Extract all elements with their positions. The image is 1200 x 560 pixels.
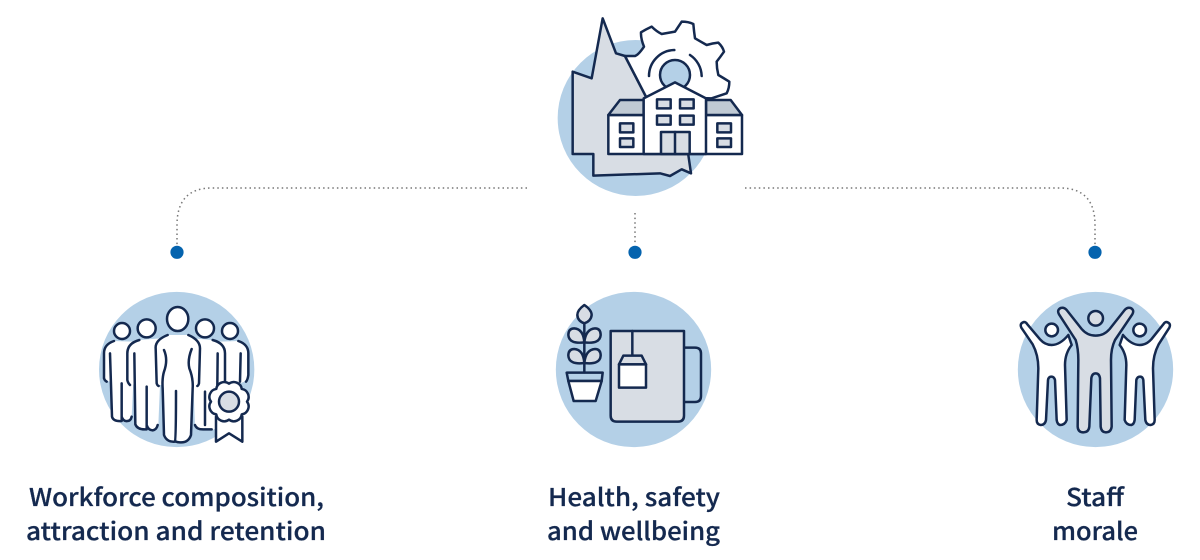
person far left (104, 323, 133, 421)
connector dot: right (1088, 246, 1102, 259)
icon background circle (1018, 292, 1173, 447)
label: workforce: attraction and retention (26, 513, 326, 548)
icon: plant and mug of tea (556, 292, 711, 447)
label: morale: Staff (1066, 479, 1126, 514)
plant (567, 305, 603, 401)
mug (611, 331, 684, 422)
mug handle (684, 348, 701, 402)
signal arcs (649, 50, 702, 76)
left person (1021, 322, 1072, 425)
icon background circle (99, 292, 254, 447)
connector dot: left (170, 246, 184, 259)
central person (1058, 308, 1133, 432)
icon background circle (558, 40, 714, 196)
icon background circle (556, 292, 711, 447)
label: health: and wellbeing (547, 513, 720, 548)
connector: right branch (745, 188, 1095, 245)
connector: centre branch (634, 213, 636, 245)
label: workforce (26, 479, 326, 548)
gear centre (660, 60, 690, 90)
person left (127, 319, 160, 430)
tea bag (619, 331, 646, 388)
person right (193, 319, 225, 430)
central person (156, 307, 200, 442)
building (608, 82, 742, 154)
label: health: Health, safety (548, 479, 720, 514)
right person (1120, 322, 1170, 425)
icon: workforce group with award rosette (99, 292, 254, 447)
person far right (220, 323, 248, 385)
label: morale: morale (1052, 513, 1138, 548)
label: morale (1052, 479, 1138, 548)
icon: three people celebrating (1018, 292, 1173, 447)
map outline (573, 18, 691, 176)
gear (625, 22, 729, 98)
award rosette (209, 382, 249, 442)
label: health (547, 479, 720, 548)
icon: regional map, gear and building (558, 18, 742, 196)
connector dot: centre (628, 246, 642, 259)
label: workforce: Workforce composition, (29, 479, 324, 514)
connector: left branch (177, 188, 527, 245)
